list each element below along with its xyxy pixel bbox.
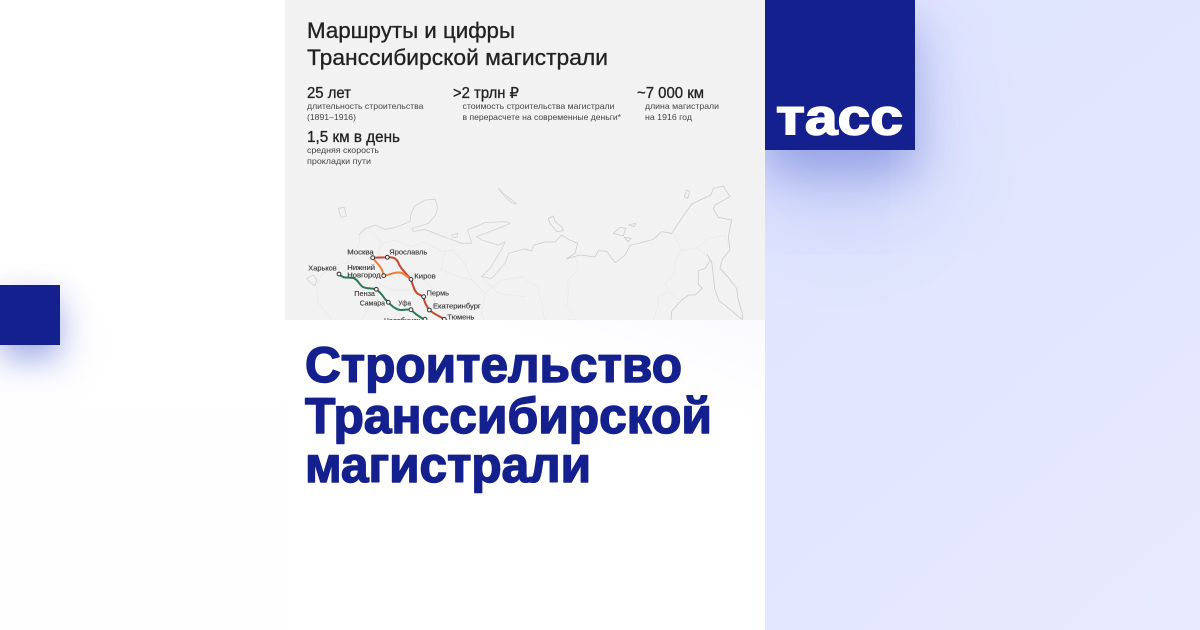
internal borders east — [525, 233, 728, 320]
left decorative square — [0, 285, 60, 345]
stat: 1,5 км в день — [307, 129, 400, 166]
logo wordmark: тасс — [776, 88, 903, 146]
infographic heading: Маршруты и цифры — [307, 18, 515, 43]
route: Nizhny Novgorod line — [373, 258, 411, 279]
stat: 1,5 км в день: средняя скорость — [307, 145, 379, 155]
main title — [304, 337, 712, 494]
city labels: Киров — [414, 271, 436, 280]
stat: 2 трлн: в перерасчете на современные деньги* — [462, 112, 622, 122]
city labels: Харьков — [308, 263, 337, 272]
right background panel — [765, 0, 1200, 630]
stat: 2 трлн — [453, 85, 622, 122]
stat: 7000 км — [637, 85, 719, 122]
stat: 2 трлн: стоимость строительства магистрали — [462, 101, 615, 111]
logo tile: ТАСС — [765, 0, 915, 150]
stat: 25 лет: длительность строительства — [307, 101, 424, 111]
city labels: Москва — [347, 248, 374, 257]
white title column — [285, 320, 765, 630]
stat: 7000 км: на 1916 год — [645, 112, 692, 122]
main title: магистрали — [305, 437, 591, 493]
panel: infographic preview — [285, 0, 765, 320]
main title: Транссибирской — [305, 388, 712, 444]
city labels: Екатеринбург — [433, 302, 481, 311]
main title: Строительство — [305, 337, 682, 393]
city labels: Уфа — [398, 298, 411, 307]
stat: 2 трлн: >2 трлн ₽ — [453, 85, 519, 102]
stat: 1,5 км в день: прокладки пути — [307, 156, 371, 166]
stat: 25 лет — [307, 85, 424, 122]
coastline east — [525, 186, 742, 320]
city labels: Самара — [360, 298, 385, 307]
coastline west — [307, 188, 525, 286]
city labels: Пенза — [354, 289, 375, 298]
infographic heading: Транссибирской магистрали — [307, 45, 608, 70]
route stations — [337, 255, 446, 321]
stat: 1,5 км в день: 1,5 км в день — [307, 129, 400, 146]
route: southern line — [339, 274, 425, 320]
city labels: Новгород — [347, 271, 382, 280]
stat: 7000 км: длина магистрали — [645, 101, 719, 111]
internal borders west — [317, 225, 525, 320]
city labels — [308, 248, 481, 325]
stat: 7000 км: ~7 000 км — [637, 85, 704, 102]
route: northern line — [373, 257, 446, 320]
stat: 25 лет: (1891–1916) — [307, 112, 356, 122]
city labels: Нижний — [347, 263, 375, 272]
stat: 25 лет: 25 лет — [307, 85, 351, 102]
city labels: Пермь — [427, 288, 449, 297]
infographic heading — [307, 18, 608, 70]
city labels: Ярославль — [389, 248, 428, 257]
map of Russia — [307, 186, 742, 325]
